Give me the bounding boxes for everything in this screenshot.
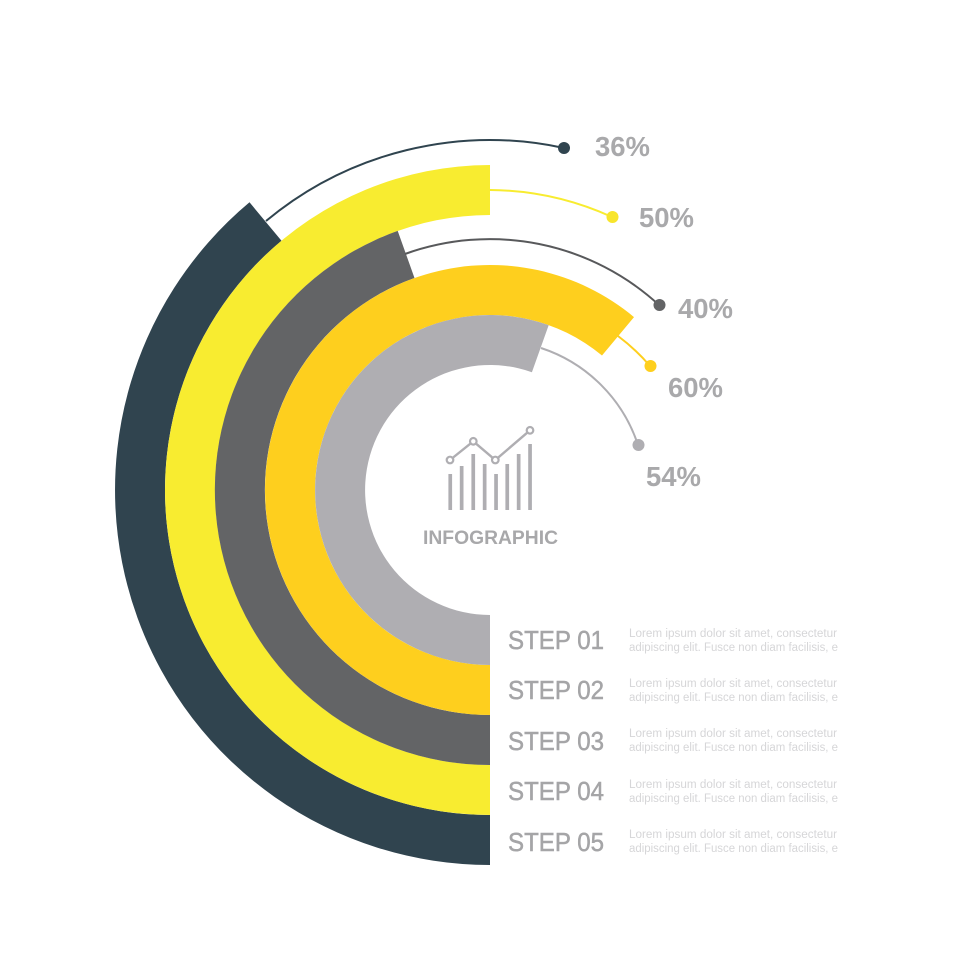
ring: 54% light gray: [315, 315, 549, 665]
label: 36%: 36%: [595, 131, 650, 162]
ring: 36% dark navy: [115, 202, 490, 865]
icon: bar and line chart: [447, 427, 533, 510]
step 02: [508, 675, 838, 705]
step 02 description: [629, 678, 838, 704]
label: 60%: 60%: [668, 372, 723, 403]
connector: 36%: [266, 140, 570, 221]
step 03 description: adipiscing elit. Fusce non diam facilisis, e: [629, 742, 838, 754]
step 01: [508, 625, 838, 655]
step 05 description: adipiscing elit. Fusce non diam facilisis, e: [629, 843, 838, 855]
step 01 description: [629, 628, 838, 654]
step 04 heading: STEP 04: [508, 776, 604, 806]
step 05: [508, 827, 838, 857]
connector: 54%: [541, 348, 644, 451]
step 05 description: [629, 829, 838, 855]
step 01 description: Lorem ipsum dolor sit amet, consectetur: [629, 628, 837, 640]
label: 54%: 54%: [646, 461, 701, 492]
step 05 heading: STEP 05: [508, 827, 604, 857]
step 04 description: [629, 779, 838, 805]
step 01 description: adipiscing elit. Fusce non diam facilisis, e: [629, 642, 838, 654]
step 03 heading: STEP 03: [508, 726, 604, 756]
ring: 60% golden yellow: [265, 265, 634, 715]
connector: 50%: [490, 190, 618, 223]
step 04 description: Lorem ipsum dolor sit amet, consectetur: [629, 779, 837, 791]
step 04: [508, 776, 838, 806]
ring: 40% dark gray: [215, 231, 490, 765]
center title: INFOGRAPHIC: [423, 528, 558, 549]
ring: 50% bright yellow: [165, 165, 490, 815]
connector: 60%: [618, 336, 656, 372]
radial chart: [115, 165, 634, 865]
label: 40%: 40%: [678, 293, 733, 324]
step 03 description: Lorem ipsum dolor sit amet, consectetur: [629, 728, 837, 740]
step 03 description: [629, 728, 838, 754]
step 03: [508, 726, 838, 756]
step 02 heading: STEP 02: [508, 675, 604, 705]
connector: 40%: [405, 239, 666, 311]
step 04 description: adipiscing elit. Fusce non diam facilisis, e: [629, 793, 838, 805]
step 01 heading: STEP 01: [508, 625, 604, 655]
step 05 description: Lorem ipsum dolor sit amet, consectetur: [629, 829, 837, 841]
step 02 description: Lorem ipsum dolor sit amet, consectetur: [629, 678, 837, 690]
label: 50%: 50%: [639, 202, 694, 233]
step 02 description: adipiscing elit. Fusce non diam facilisis, e: [629, 692, 838, 704]
